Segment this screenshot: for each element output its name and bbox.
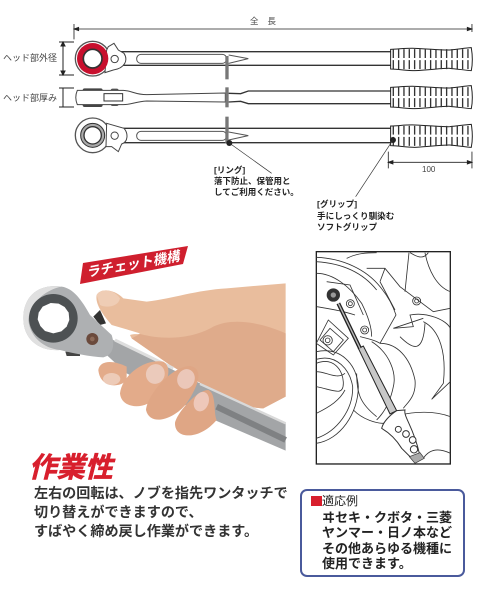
ring leader line with dot bbox=[226, 140, 272, 173]
grip leader line with dot bbox=[356, 137, 396, 197]
panel text: その他あらゆる機種に bbox=[322, 541, 452, 556]
grip: side view bbox=[391, 86, 472, 109]
wrench shaft bbox=[107, 338, 286, 451]
dimension: head outer diameter bbox=[59, 42, 74, 75]
dimension: head thickness bbox=[59, 88, 74, 107]
illustration: wrench on tiller bbox=[316, 252, 450, 464]
callout: grip: [グリップ] bbox=[317, 199, 357, 209]
banner: ratchet mechanism bbox=[80, 246, 188, 284]
photo: hand holding ratchet bbox=[23, 283, 286, 451]
panel text bbox=[322, 510, 452, 571]
panel text: ヤンマー・日ノ本など bbox=[322, 525, 452, 540]
callout: grip bbox=[317, 199, 394, 232]
callout: ring: してご利用ください。 bbox=[214, 187, 299, 197]
wrench: top view bbox=[75, 41, 392, 79]
dimension: grip length 100 bbox=[388, 152, 472, 168]
callout: ring: [リング] bbox=[214, 165, 245, 175]
label: head outer diameter: ヘッド部外径 bbox=[3, 52, 57, 63]
label: 100: 100 bbox=[422, 165, 436, 174]
panel heading: 適応例 bbox=[322, 494, 358, 508]
panel text: 使用できます。 bbox=[322, 556, 412, 571]
panel: applicable models bbox=[300, 489, 465, 577]
callout: ring: 落下防止、保管用と bbox=[214, 176, 291, 186]
heading: workability: 作業性 bbox=[27, 452, 119, 483]
ratchet knobs bbox=[93, 310, 106, 325]
text block: description: 左右の回転は、ノブを指先ワンタッチで bbox=[34, 485, 288, 501]
wrench: bottom view bbox=[75, 117, 392, 153]
grip: top view bbox=[391, 48, 472, 71]
red square marker bbox=[311, 496, 322, 506]
fingers bbox=[98, 362, 127, 385]
palm shadow bbox=[132, 322, 286, 408]
banner text: ラチェット機構 bbox=[85, 248, 183, 280]
palm and thumb bbox=[96, 283, 286, 408]
dimension: overall length bbox=[74, 24, 472, 39]
callout: grip: 手にしっくり馴染む bbox=[317, 210, 394, 220]
grip: bottom view bbox=[391, 124, 472, 147]
callout: grip: ソフトグリップ bbox=[317, 222, 377, 232]
label: overall length: 全長 bbox=[250, 16, 285, 26]
callout: ring bbox=[214, 165, 299, 197]
text block: description: 切り替えができますので、 bbox=[34, 504, 203, 520]
label: head thickness: ヘッド部厚み bbox=[3, 93, 57, 103]
ratchet head bbox=[23, 286, 113, 357]
text block: description: すばやく締め戻し作業ができます。 bbox=[34, 523, 258, 539]
wrench: side view bbox=[76, 87, 392, 107]
text block: description bbox=[34, 485, 288, 539]
fingernails bbox=[143, 361, 168, 387]
panel text: ヰセキ・クボタ・三菱 bbox=[322, 510, 452, 525]
